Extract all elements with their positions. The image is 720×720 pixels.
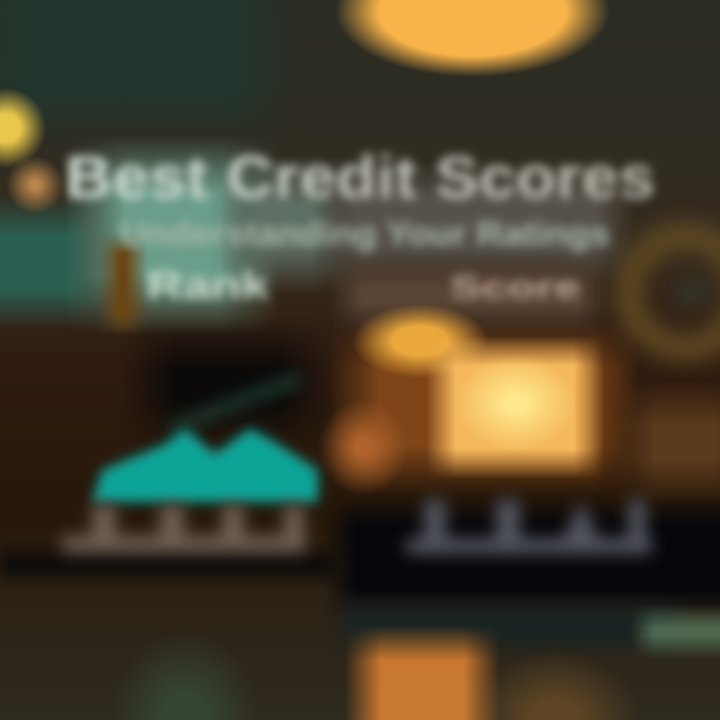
grey-green title backdrop xyxy=(218,162,344,289)
small orange wall light xyxy=(6,156,64,214)
top left dark teal wall xyxy=(7,0,252,104)
bright lit window xyxy=(426,336,604,479)
hanging lamp xyxy=(352,304,488,378)
dark base under left caption xyxy=(0,547,334,582)
floor green strip xyxy=(633,606,720,657)
orange glow xyxy=(318,400,408,495)
brown post xyxy=(100,234,146,332)
dark base under right caption xyxy=(332,502,720,612)
left caption block xyxy=(62,505,306,552)
right caption block xyxy=(406,500,652,554)
title: Best Credit Scores xyxy=(65,144,655,211)
floor green reflection xyxy=(110,630,260,720)
yellow wall light xyxy=(0,88,46,168)
subtitle: Understanding Your Ratings xyxy=(120,215,610,253)
round wall ornament on right xyxy=(629,236,720,348)
area chart: teal mountains xyxy=(92,378,318,502)
left label: Rank xyxy=(147,265,270,307)
floor teal strip xyxy=(341,606,664,647)
right warm wall xyxy=(622,388,720,497)
ceiling lamp glow xyxy=(335,0,610,77)
floor orange reflection xyxy=(345,625,500,720)
window hot spot xyxy=(455,355,577,451)
grey title backdrop right xyxy=(335,169,626,276)
brown label backdrop xyxy=(337,267,602,327)
pale teal title backdrop xyxy=(65,135,280,335)
teal panel left xyxy=(0,202,100,324)
warm orange wall xyxy=(336,326,634,490)
floor brown reflection xyxy=(470,650,640,720)
trend line arrow xyxy=(170,378,300,430)
dark chart backdrop xyxy=(132,326,322,441)
right label: Score xyxy=(450,269,580,305)
